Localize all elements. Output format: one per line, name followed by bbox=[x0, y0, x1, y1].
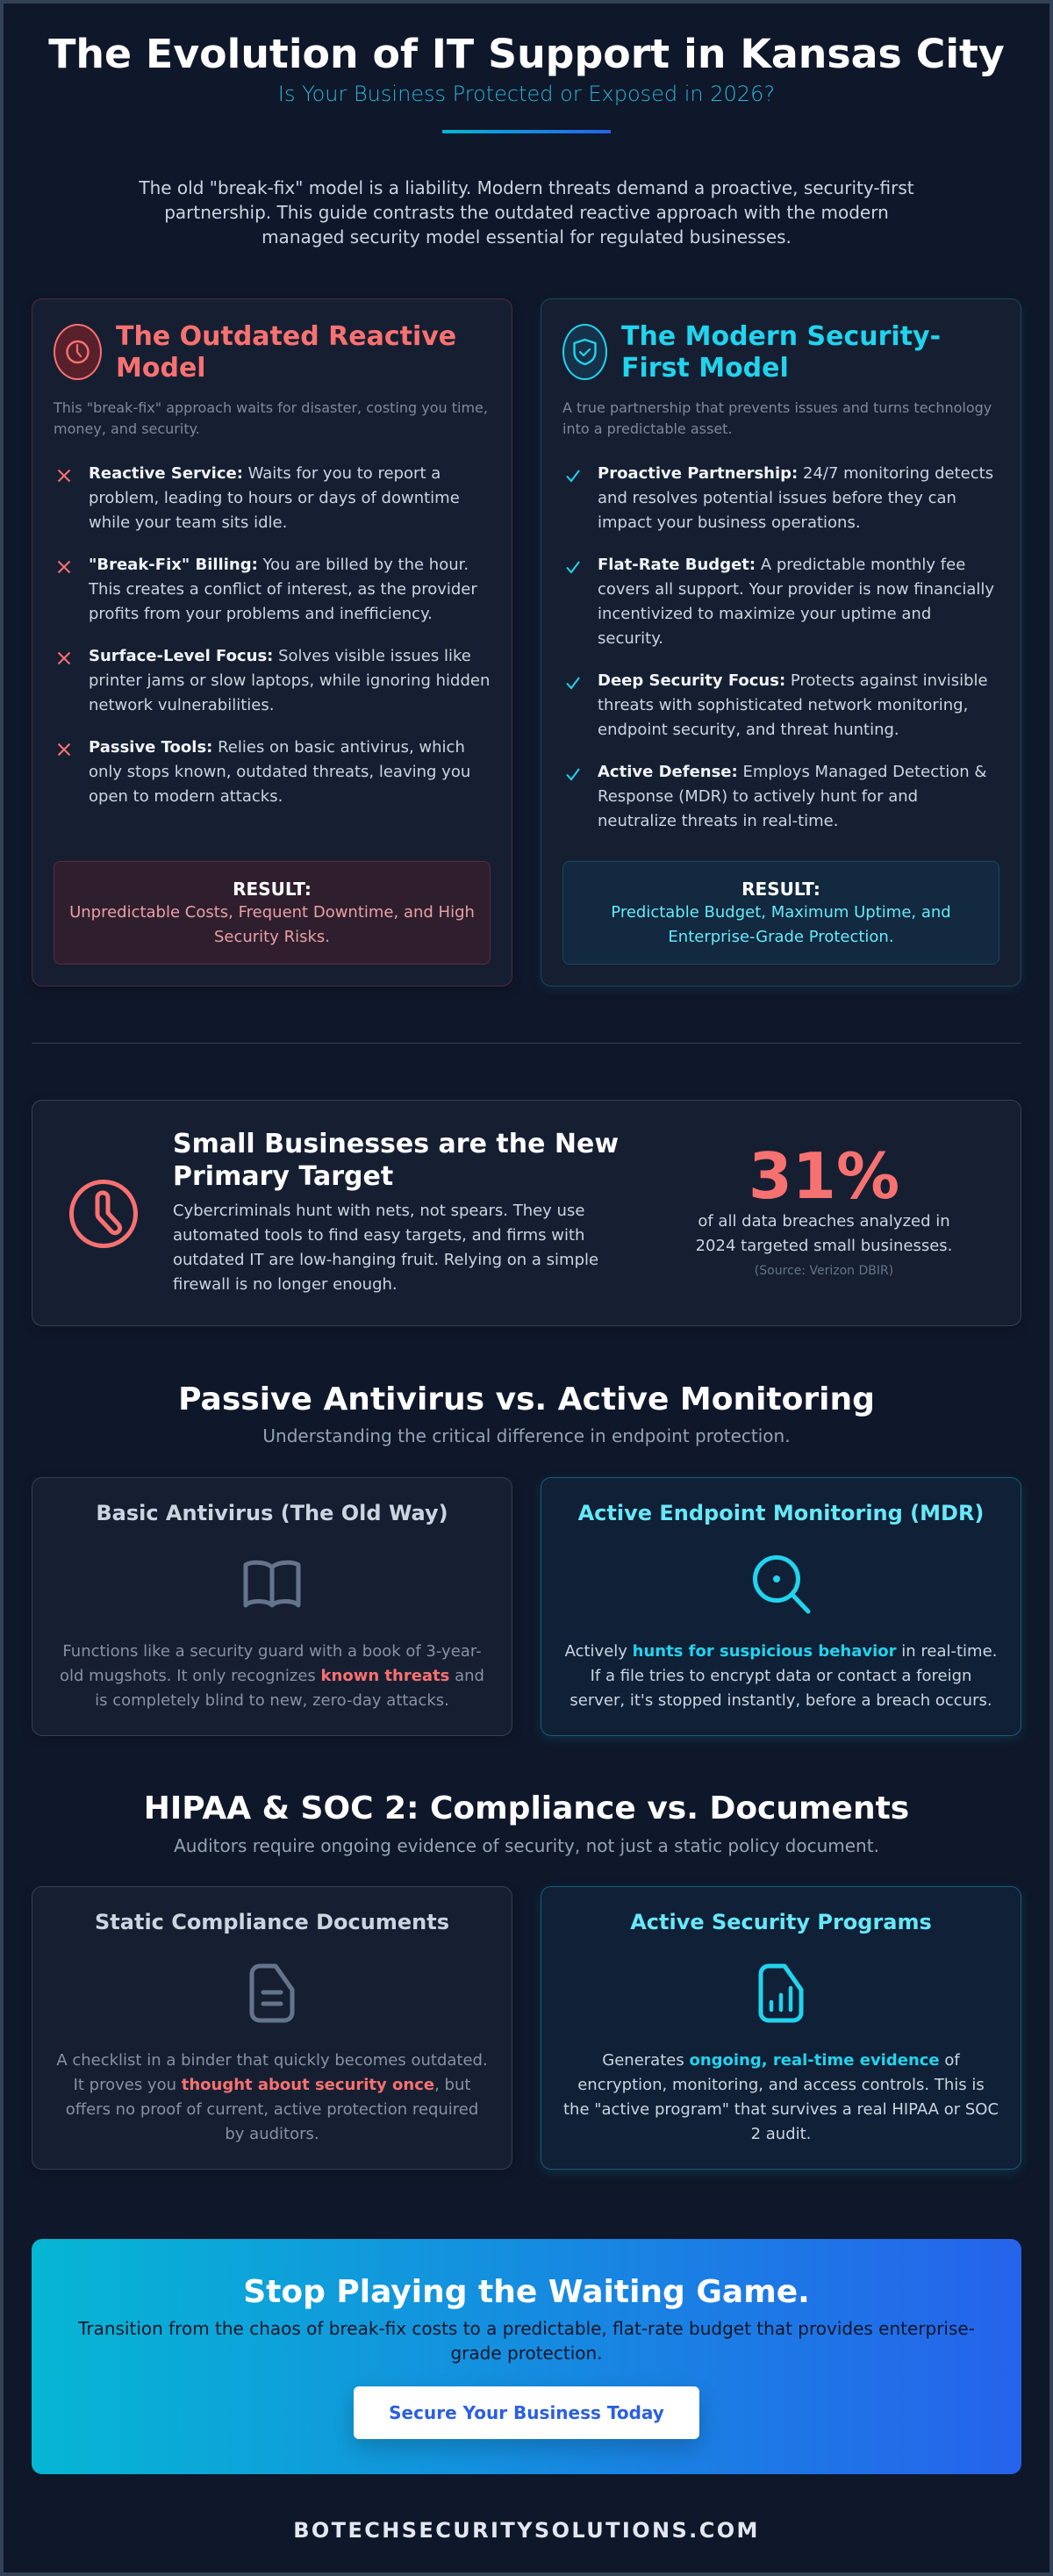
icon: clock outline bbox=[69, 1180, 138, 1248]
accent bar bbox=[442, 130, 611, 133]
source: (Source: Verizon DBIR) bbox=[755, 1264, 893, 1278]
icon: document with chart bbox=[758, 1964, 804, 2022]
callout: result: Unpredictable Costs, Frequent Downtime, and High Security Risks. bbox=[69, 903, 475, 946]
card text: A checklist in a binder that quickly becomes outdated. It proves you thought about security once, but offers no proof of current, active protection required by auditors. bbox=[56, 2051, 488, 2143]
icon: book bbox=[244, 1561, 300, 1608]
item: active defense: Active Defense: Employs Managed Detection & Response (MDR) to actively hunt for and neutralize threats in real-time. bbox=[598, 763, 986, 830]
stat: 31 percent: 31% bbox=[749, 1139, 899, 1213]
panel: small business stat bbox=[32, 1100, 1021, 1326]
icon: x mark 4 bbox=[58, 743, 70, 757]
intro text: The old "break-fix" model is a liability. Modern threats demand a proactive, security-first partnership. This guide contrasts the outdated reactive approach with the modern managed security model essential for regulated businesses. bbox=[139, 177, 914, 248]
panel: active security programs bbox=[541, 1886, 1021, 2170]
icon: check 2 bbox=[566, 561, 580, 574]
icon: shield bbox=[562, 324, 607, 380]
CTA heading: Stop Playing the Waiting Game. bbox=[243, 2274, 810, 2310]
heading: HIPAA and SOC 2: HIPAA & SOC 2: Compliance vs. Documents bbox=[144, 1790, 909, 1826]
callout: result bbox=[562, 861, 999, 965]
item: proactive partnership: Proactive Partnership: 24/7 monitoring detects and resolves potential issues before they can impact your business operations. bbox=[598, 464, 993, 532]
item: break-fix billing: "Break-Fix" Billing: You are billed by the hour. This creates a conflict of interest, as the provider profits from your problems and inefficiency. bbox=[89, 556, 477, 623]
stat caption: of all data breaches analyzed in 2024 targeted small businesses. bbox=[696, 1212, 952, 1255]
card text: Functions like a security guard with a book of 3-year-old mugshots. It only recognizes known threats and is completely blind to new, zero-day attacks. bbox=[60, 1642, 484, 1710]
subheading: Understanding the critical difference in endpoint protection. bbox=[262, 1425, 791, 1446]
icon: check 1 bbox=[566, 470, 580, 483]
callout: result bbox=[54, 861, 491, 965]
icon: x mark 3 bbox=[58, 651, 70, 665]
CTA text: Transition from the chaos of break-fix costs to a predictable, flat-rate budget that provides enterprise-grade protection. bbox=[78, 2318, 975, 2364]
panel: static compliance documents bbox=[32, 1886, 512, 2170]
card title: Static Compliance Documents bbox=[95, 1910, 449, 1934]
item: flat-rate budget: Flat-Rate Budget: A predictable monthly fee covers all support. Your provider is now financially incentivized to maximize your uptime and security. bbox=[598, 556, 994, 648]
item: surface-level focus: Surface-Level Focus: Solves visible issues like printer jams or slow laptops, while ignoring hidden network vulnerabilities. bbox=[89, 647, 490, 714]
card text: Generates ongoing, real-time evidence of encryption, monitoring, and access controls. This is the "active program" that survives a real HIPAA or SOC 2 audit. bbox=[563, 2051, 999, 2143]
item: reactive service: Reactive Service: Waits for you to report a problem, leading to hours or days of downtime while your team sits idle. bbox=[89, 464, 460, 532]
CTA button: Secure Your Business Today bbox=[389, 2402, 664, 2423]
card text: Actively hunts for suspicious behavior in real-time. If a file tries to encrypt data or contact a foreign server, it's stopped instantly, before a breach occurs. bbox=[565, 1642, 997, 1710]
footer website: BOTECHSECURITYSOLUTIONS.COM bbox=[293, 2518, 760, 2543]
subtitle: Is Your Business Protected or Exposed in 2026? bbox=[278, 82, 775, 106]
callout: result: Predictable Budget, Maximum Uptime, and Enterprise-Grade Protection. bbox=[611, 903, 951, 946]
heading: The Modern Security-First Model bbox=[621, 321, 941, 384]
panel: basic antivirus bbox=[32, 1477, 512, 1736]
card title: Active Security Programs bbox=[630, 1910, 932, 1934]
call to action panel bbox=[32, 2239, 1021, 2474]
subheading: Auditors require ongoing evidence of security, not just a static policy document. bbox=[174, 1835, 879, 1856]
icon: document bbox=[249, 1964, 295, 2022]
icon: magnifier bbox=[753, 1555, 811, 1613]
icon: check 4 bbox=[566, 768, 580, 781]
description: A true partnership that prevents issues and turns technology into a predictable asset. bbox=[562, 399, 992, 437]
icon: clock bbox=[54, 324, 102, 380]
heading: antivirus vs monitoring: Passive Antivirus vs. Active Monitoring bbox=[178, 1381, 875, 1417]
heading: Small Businesses are the New Primary Target bbox=[173, 1129, 619, 1192]
description: This "break-fix" approach waits for disaster, costing you time, money, and security. bbox=[54, 399, 488, 437]
callout: result: RESULT: bbox=[233, 879, 312, 900]
body text: Cybercriminals hunt with nets, not spears. They use automated tools to find easy targets, and firms with outdated IT are low-hanging fruit. Relying on a simple firewall is no longer enough. bbox=[173, 1202, 598, 1294]
heading: The Outdated Reactive Model bbox=[116, 321, 456, 384]
callout: result: RESULT: bbox=[741, 879, 820, 900]
CTA button bbox=[354, 2386, 699, 2439]
item: passive tools: Passive Tools: Relies on basic antivirus, which only stops known, outdated threats, leaving you open to modern attacks. bbox=[89, 738, 470, 806]
panel: active endpoint monitoring bbox=[541, 1477, 1021, 1736]
title: The Evolution of IT Support in Kansas City bbox=[48, 30, 1005, 77]
item: deep security focus: Deep Security Focus: Protects against invisible threats with sophisticated network monitoring, endpoint security, and threat hunting. bbox=[598, 671, 988, 739]
card title: Active Endpoint Monitoring (MDR) bbox=[578, 1501, 984, 1525]
icon: check 3 bbox=[566, 677, 580, 690]
panel: modern security-first model bbox=[541, 298, 1021, 987]
icon: x mark 2 bbox=[58, 560, 70, 574]
card title: Basic Antivirus (The Old Way) bbox=[96, 1501, 448, 1525]
panel: outdated reactive model bbox=[32, 298, 512, 987]
icon: x mark 1 bbox=[58, 469, 70, 483]
